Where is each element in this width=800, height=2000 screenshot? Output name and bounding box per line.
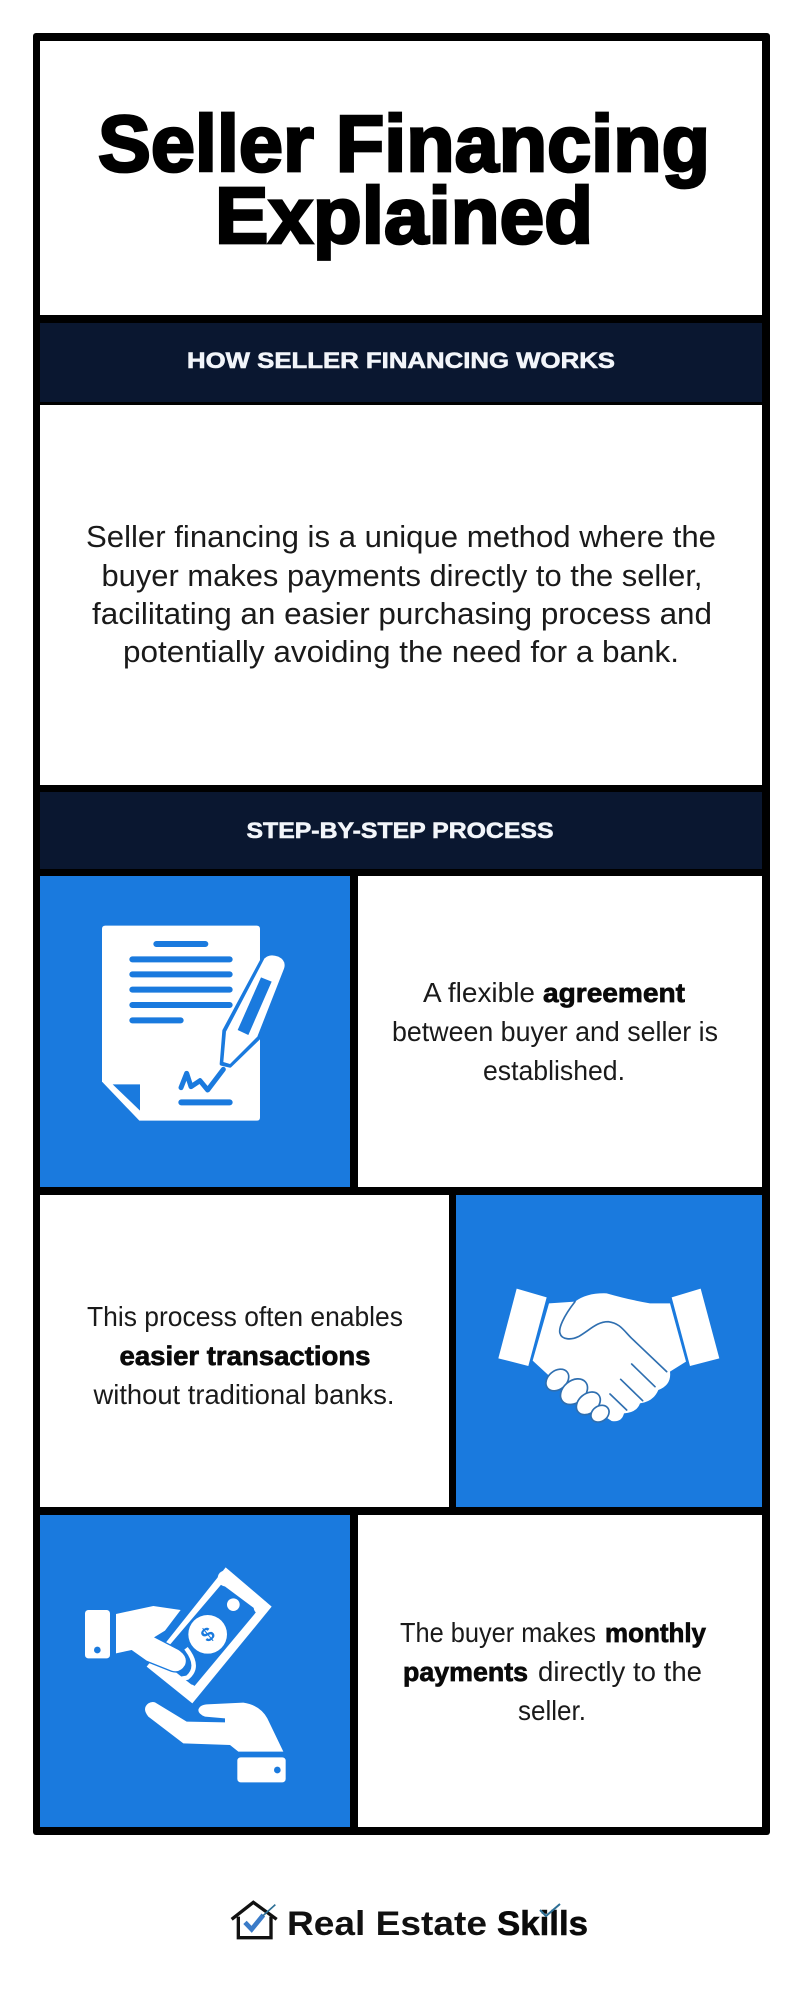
panel: step 1 text bbox=[358, 876, 762, 1187]
panel: how seller financing works heading bbox=[40, 323, 762, 402]
panel: step 3 text: The buyer makes bbox=[400, 1617, 596, 1648]
icon: banknote bbox=[147, 1567, 272, 1703]
icon: top hand cuff bbox=[85, 1610, 110, 1658]
panel: step 1 text: A flexible bbox=[423, 977, 535, 1008]
panel: step 3 text: monthly bbox=[605, 1618, 706, 1648]
panel: step 2 text: without traditional banks. bbox=[93, 1379, 394, 1410]
title: Explained bbox=[215, 171, 593, 260]
description text: potentially avoiding the need for a bank. bbox=[123, 634, 679, 669]
description text: Seller financing is a unique method where the bbox=[86, 519, 716, 554]
panel: step 1 text: established. bbox=[483, 1055, 625, 1086]
icon: signed document bbox=[102, 926, 286, 1121]
panel: step-by-step process heading: STEP-BY-STEP PROCESS bbox=[246, 818, 554, 843]
description text: buyer makes payments directly to the seller, bbox=[102, 558, 702, 593]
icon: top hand bbox=[116, 1606, 186, 1671]
panel: step 3 text: seller. bbox=[518, 1695, 586, 1726]
icon: crescent under finger bbox=[174, 1648, 194, 1680]
panel: step 1 text: between buyer and seller is bbox=[392, 1016, 718, 1047]
icon: banknote: $ bbox=[197, 1623, 220, 1647]
title: Seller Financing bbox=[98, 99, 710, 188]
panel: description bbox=[40, 405, 762, 785]
panel: step 3 icon bbox=[40, 1515, 350, 1827]
icon: check above Skills bbox=[540, 1904, 560, 1916]
icon: hands exchanging money bbox=[85, 1567, 286, 1782]
panel: step-by-step process heading bbox=[40, 792, 762, 869]
panel: title bbox=[40, 41, 762, 315]
panel: step 3 text: payments bbox=[403, 1657, 528, 1687]
icon: handshake bbox=[498, 1289, 719, 1425]
panel: step 3 text bbox=[358, 1515, 762, 1827]
description text: facilitating an easier purchasing process and bbox=[92, 596, 712, 631]
panel: how seller financing works heading: HOW SELLER FINANCING WORKS bbox=[187, 348, 615, 373]
panel: step 1 icon bbox=[40, 876, 350, 1187]
logo: Real Estate Skills bbox=[232, 1902, 588, 1943]
icon: house with check mark bbox=[232, 1902, 277, 1938]
panel: step 1 text: agreement bbox=[543, 978, 685, 1008]
title bbox=[98, 99, 710, 260]
logo: Real Estate Skills: Real Estate bbox=[287, 1905, 487, 1943]
panel: step 2 text bbox=[40, 1195, 449, 1507]
description text bbox=[86, 519, 716, 669]
panel: step 3 text: directly to the bbox=[538, 1656, 702, 1687]
icon: bottom hand cuff bbox=[237, 1757, 286, 1782]
icon: bottom hand bbox=[145, 1702, 283, 1752]
logo: Real Estate Skills: Skills bbox=[497, 1905, 588, 1943]
icon: pen bbox=[221, 954, 286, 1066]
panel: step 2 text: easier transactions bbox=[120, 1341, 370, 1371]
panel: step 2 icon bbox=[456, 1195, 762, 1507]
panel: step 2 text: This process often enables bbox=[87, 1301, 403, 1332]
